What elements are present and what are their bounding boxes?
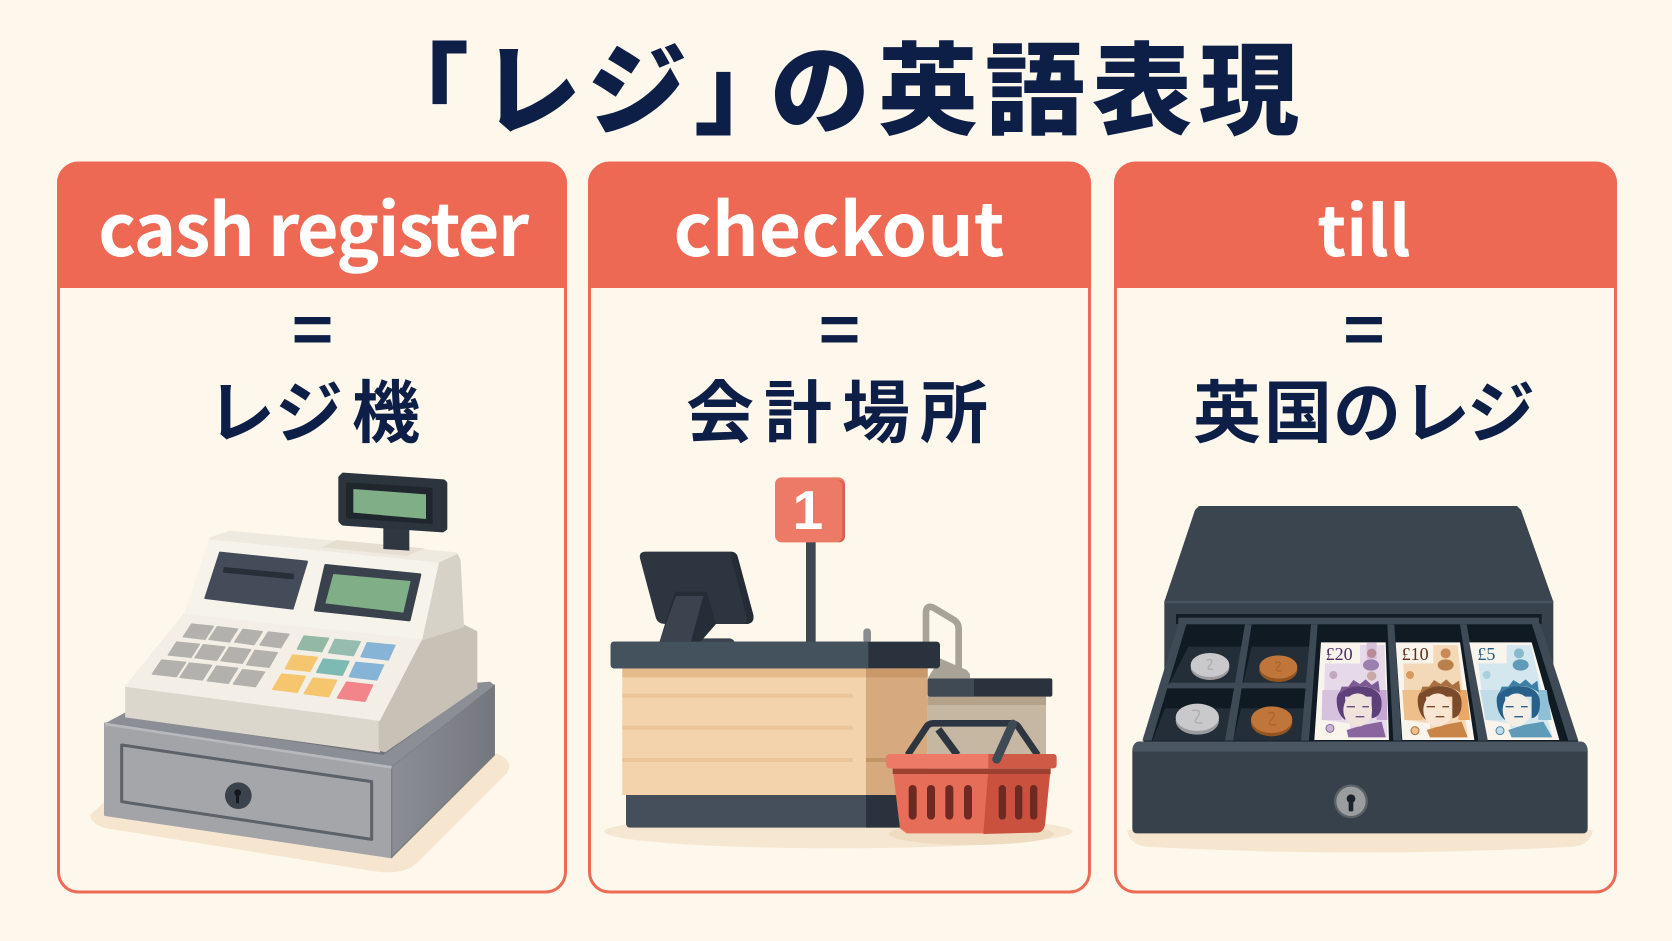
main screen [315,565,420,620]
lane number sign [775,477,845,643]
customer display [341,475,445,551]
header: cash register [57,162,567,288]
panel: cash register [57,162,567,892]
keypad [152,624,395,701]
subheading: 会計場所: 会計場所 [686,358,988,457]
drawer lock [1334,784,1368,818]
drawer front [1132,742,1588,833]
illustration: cash register [90,475,509,872]
header: till [1114,162,1617,288]
illustration: till drawer [1127,506,1593,852]
title: 「レジ」の英語表現 [369,10,1299,155]
counter base [626,795,903,828]
panel: checkout [588,162,1091,892]
counter top [611,642,940,668]
equals sign: = [819,276,860,377]
small post [863,628,871,643]
register body [126,532,477,755]
header: checkout [588,162,1091,288]
banknote: £5: £5 [1477,644,1495,664]
floor shadow [1127,830,1593,852]
cash drawer base [105,682,494,857]
floor shadow [604,815,1073,848]
till housing [1164,506,1553,682]
shopping basket [886,723,1057,834]
illustration: checkout counter [604,477,1073,848]
banknote: £5 [1469,642,1559,740]
floor shadow [90,753,509,872]
banknote: £20: £20 [1326,644,1353,664]
banknote: £10: £10 [1402,644,1429,664]
heading text: till: till [1317,176,1411,276]
counter body [622,668,928,795]
heading text: cash register: cash register [98,172,530,277]
POS monitor [640,552,754,643]
receipt printer [205,553,307,609]
panel: till [1114,162,1617,892]
subheading: 英国のレジ: 英国のレジ [1193,358,1535,457]
banknote: £20 [1314,642,1389,740]
cart rail [926,607,970,678]
coins [1176,653,1297,736]
equals sign: = [292,276,333,377]
equals sign: = [1343,276,1385,377]
banknote: £10 [1396,642,1474,740]
heading text: checkout: checkout [674,172,1004,278]
open tray [1142,618,1578,742]
lane number sign: 1 [793,479,823,541]
subheading: レジ機: レジ機 [207,358,420,457]
bagging shelf [928,678,1052,763]
drawer lock [225,782,252,809]
basket shadow [889,823,1054,845]
